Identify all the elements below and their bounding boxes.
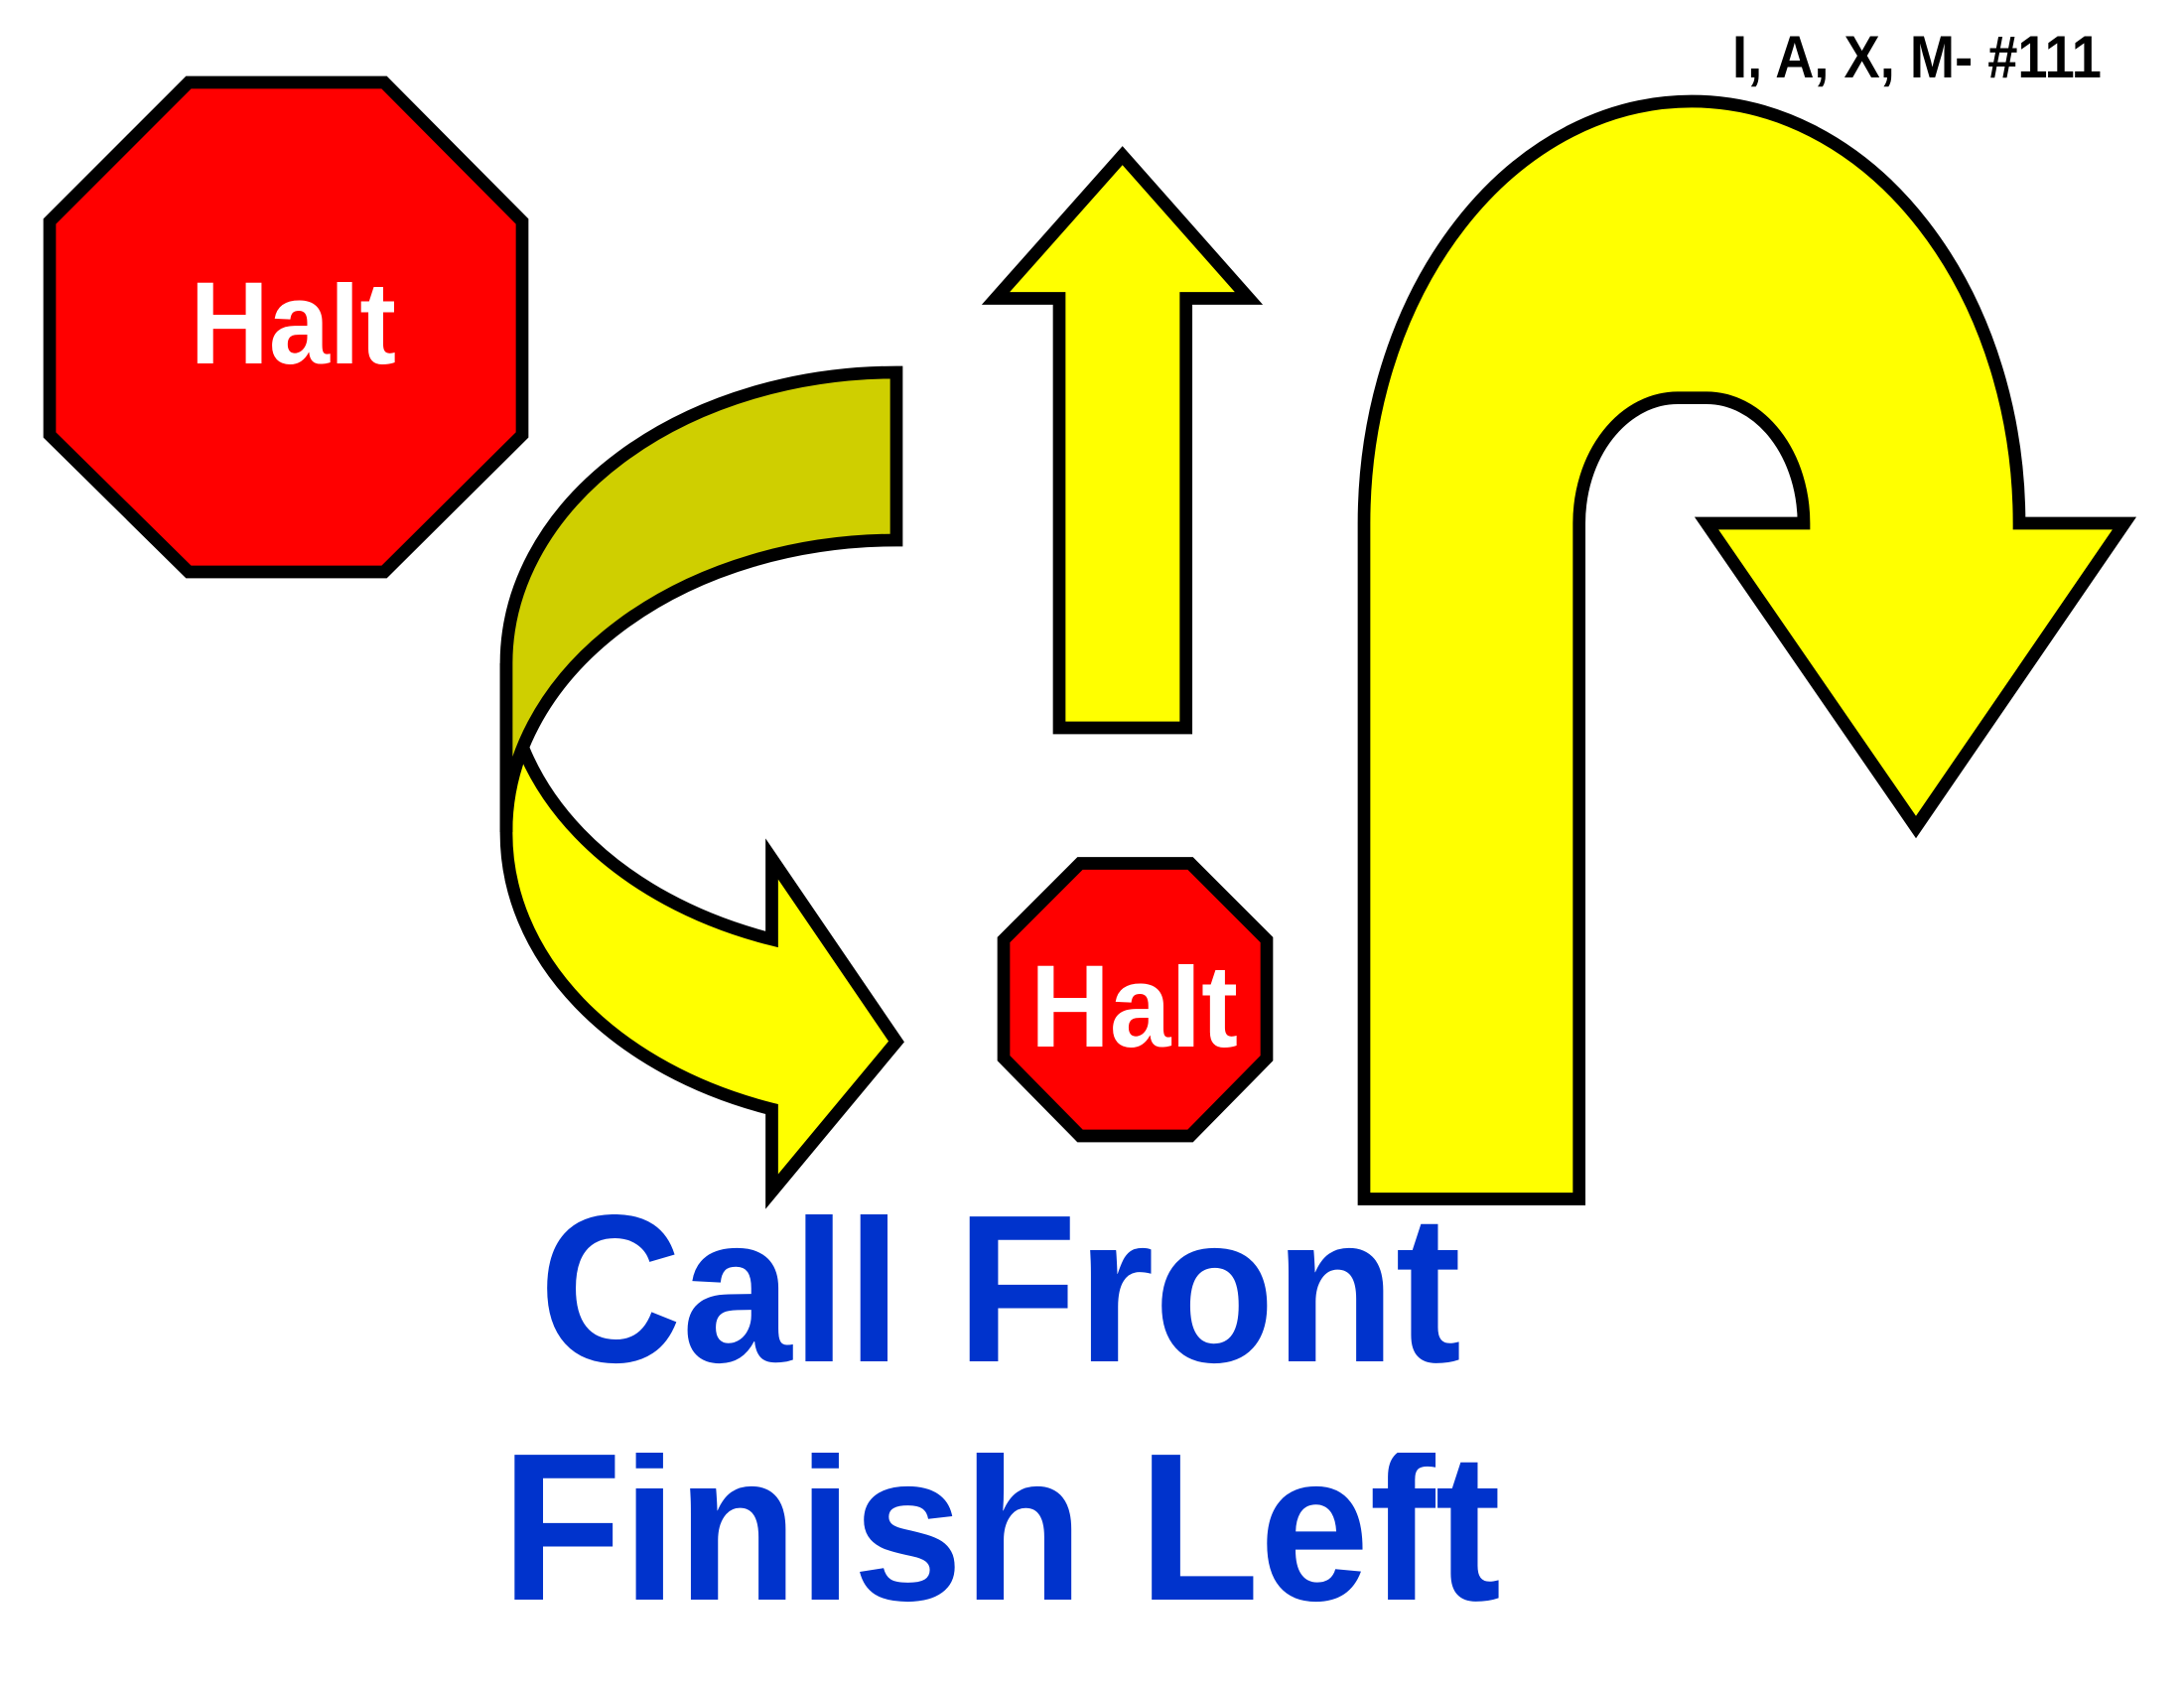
icon: small halt sign: Halt <box>1030 941 1238 1072</box>
play name: line two: Finish Left <box>501 1409 1501 1644</box>
play name: line one: Call Front <box>539 1171 1461 1406</box>
arrow: curved arrow turning back to the right <box>506 372 896 1192</box>
play number label: I, A, X, M- #111 <box>1732 24 2102 90</box>
arrow: large U-turn <box>1364 101 2124 1199</box>
icon: large halt sign <box>50 82 522 572</box>
icon: small halt sign <box>1004 864 1267 1136</box>
icon: large halt sign: Halt <box>191 258 396 389</box>
arrow: straight up <box>996 156 1249 728</box>
